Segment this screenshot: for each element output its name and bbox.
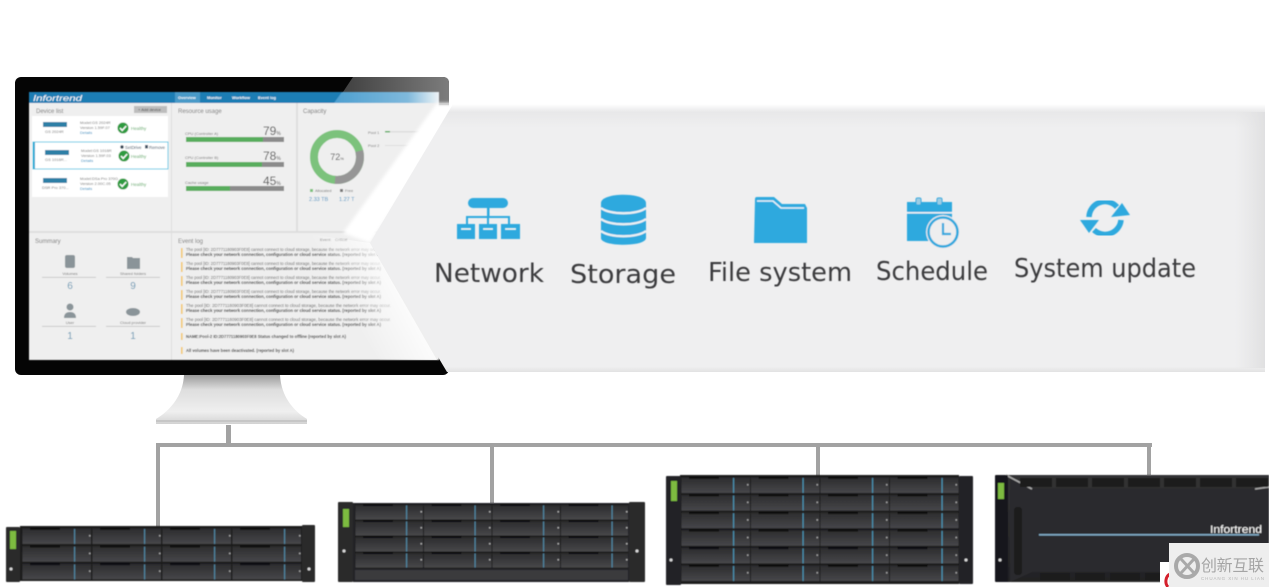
panel: capacity: Allocated xyxy=(315,188,331,193)
panel: capacity: Free xyxy=(345,188,354,193)
device card 2 selected: SetDrive xyxy=(125,145,142,150)
panel: event log: Please check your network connection, configuration or cloud service status. (reported by slot A) xyxy=(186,322,382,327)
panel: event log: The pool [ID: 2D7771180903F0E8] cannot connect to cloud storage, because the network error may occur. xyxy=(186,261,381,266)
device card 2 selected xyxy=(33,142,168,169)
stat: user: User xyxy=(66,320,75,325)
stat: cloud provider: Cloud provider xyxy=(120,320,147,325)
label: network: Network xyxy=(434,259,544,289)
device card 2 selected: Healthy xyxy=(131,154,147,159)
top navigation bar: Overview xyxy=(178,95,197,100)
top navigation bar: Infortrend xyxy=(33,93,82,103)
bar: cache: 45% xyxy=(263,174,281,188)
bar: CPU B: 78% xyxy=(263,149,281,163)
feature: schedule xyxy=(876,198,988,287)
bar: CPU B xyxy=(185,149,284,167)
watermark: CHUANG XIN HU LIAN xyxy=(1201,576,1264,581)
panel: event log xyxy=(172,233,439,360)
stat: volumes: Volumes xyxy=(62,271,78,276)
icon: calendar clock xyxy=(907,198,960,249)
panel: feature chevron xyxy=(370,103,1269,372)
bar: CPU A: 79% xyxy=(263,124,281,138)
monitor stand xyxy=(156,375,307,424)
panel: capacity: 2.33 TB xyxy=(309,197,328,203)
stat: cloud provider: 1 xyxy=(130,331,136,342)
panel: event log: The pool [ID: 2D7771180903F0E8] cannot connect to cloud storage, because the network error may occur. xyxy=(186,317,391,322)
bar: CPU A: CPU (Controller A) xyxy=(185,131,219,136)
device card 2 selected: Details xyxy=(81,158,93,163)
icon: sync arrows xyxy=(1080,202,1130,234)
stat: user xyxy=(42,304,96,342)
top navigation bar: Event log xyxy=(258,95,277,100)
panel: event log: Please check your network connection, configuration or cloud service status. (reported by slot A) xyxy=(186,266,382,271)
device card 2 selected: GS 1016R... xyxy=(45,157,67,162)
monitor xyxy=(15,77,462,375)
panel: capacity: Pool 1 xyxy=(368,130,380,135)
stat: volumes: 6 xyxy=(67,281,73,292)
top navigation bar xyxy=(29,92,439,103)
feature: file system xyxy=(708,197,852,288)
watermark xyxy=(1160,543,1269,587)
watermark: 创新互联 xyxy=(1201,557,1264,575)
device card 1: Details xyxy=(80,130,92,135)
panel: event log: NAME:Pool-2 ID:2D7771180903F0E8 Status changed to offline (reported by slot A) xyxy=(186,334,347,339)
brand logo: Infortrend xyxy=(1210,524,1262,536)
panel: event log: The pool [ID: 2D7771180903F0E8] cannot connect to cloud storage, because the network error may occur. xyxy=(186,289,381,294)
device card 1: Model:GS 2024R xyxy=(80,120,111,125)
panel: capacity: Capacity xyxy=(303,109,326,115)
stat: shared folders: Shared folders xyxy=(120,271,146,276)
donut chart: 72% xyxy=(330,152,344,162)
server 3 xyxy=(666,475,973,585)
watermark logo xyxy=(1176,555,1198,577)
stat: cloud provider xyxy=(106,308,160,342)
bezel inner panel xyxy=(1010,475,1269,582)
device card 3: Model:DSa Pro 370G xyxy=(80,176,118,181)
device card 3: Details xyxy=(80,186,92,191)
device card 1: Healthy xyxy=(131,126,147,131)
panel: capacity: Pool 2 xyxy=(368,143,380,148)
icon: network xyxy=(457,198,520,239)
server 4 xyxy=(995,475,1269,582)
top navigation bar: Monitor xyxy=(207,95,222,100)
label: file system: File system xyxy=(708,258,852,288)
feature: storage xyxy=(570,195,676,290)
panel: event log: The pool [ID: 2D7771180903F0E8] cannot connect to cloud storage, because the network error may occur. xyxy=(186,275,381,280)
bar: CPU B: CPU (Controller B) xyxy=(185,155,219,160)
panel: device list: Device list xyxy=(36,109,64,115)
panel: event log: Please check your network connection, configuration or cloud service status. (reported by slot A) xyxy=(186,252,382,257)
panel: event log: The pool [ID: 2D7771180903F0E8] cannot connect to cloud storage, because the network error may occur. xyxy=(186,303,391,308)
panel: device list xyxy=(29,103,171,231)
left ear with LEDs xyxy=(666,476,681,585)
bar: CPU A xyxy=(185,124,284,142)
stat: user: 1 xyxy=(67,331,73,342)
panel: event log: The pool [ID: 2D7771180903F0E8] cannot connect to cloud storage, because the network error may occur. xyxy=(186,247,381,252)
panel: summary xyxy=(29,233,171,360)
feature: network xyxy=(434,198,544,289)
feature: system update xyxy=(1014,202,1196,284)
left ear with LEDs xyxy=(338,502,353,582)
panel: event log: Please check your network connection, configuration or cloud service status. (reported by slot A) xyxy=(186,308,382,313)
left ear with LEDs xyxy=(995,475,1008,582)
device card 2 selected: Remove xyxy=(149,145,166,150)
label: storage: Storage xyxy=(570,260,676,290)
panel: event log: All volumes have been deactivated. (reported by slot A) xyxy=(186,348,295,353)
panel: device list: + Add device xyxy=(138,107,162,112)
panel: event log: Event log xyxy=(178,239,203,245)
label: system update: System update xyxy=(1014,254,1196,284)
dashboard screen xyxy=(29,92,439,360)
top navigation bar: Workflow xyxy=(232,95,251,100)
icon: folder xyxy=(754,197,807,243)
bar: cache: Cache usage xyxy=(185,180,209,185)
panel: capacity: 1.27 T xyxy=(339,197,355,203)
bar: cache xyxy=(185,174,284,191)
panel: event log: Event: xyxy=(320,237,331,242)
stat: shared folders xyxy=(106,257,160,292)
panel: event log: Please check your network connection, configuration or cloud service status. (reported by slot A) xyxy=(186,280,382,285)
frame glare xyxy=(335,77,449,104)
device card 1 xyxy=(43,120,147,135)
panel: resource usage xyxy=(172,103,296,231)
device card 3: DSR Pro 370... xyxy=(42,185,69,190)
device card 2 selected: Model:GS 1016R xyxy=(81,148,112,153)
device card 2 selected: Version 1.59F.03 xyxy=(81,153,112,158)
label: schedule: Schedule xyxy=(876,257,988,287)
accent line xyxy=(1039,534,1259,536)
panel: summary: Summary xyxy=(35,239,61,245)
panel: capacity xyxy=(298,103,439,231)
white fade over screen xyxy=(300,233,437,360)
connector lines xyxy=(156,425,1152,527)
device card 3 xyxy=(42,176,147,191)
device card 3: Version 2.00C.05 xyxy=(80,181,111,186)
white diagonal band xyxy=(343,103,462,243)
left ear with LEDs xyxy=(6,527,20,582)
panel: event log: Please check your network connection, configuration or cloud service status. (reported by slot A) xyxy=(186,294,382,299)
donut chart xyxy=(314,134,360,180)
panel: event log: Critical xyxy=(335,237,347,242)
server 2 xyxy=(338,502,645,582)
server 1 xyxy=(6,525,315,582)
icon: storage xyxy=(601,195,646,245)
device card 3: Healthy xyxy=(131,182,147,187)
panel: resource usage: Resource usage xyxy=(178,109,222,115)
device card 1: Version 1.59F.07 xyxy=(80,125,111,130)
monitor frame xyxy=(15,77,449,375)
device card 1: GS 2024R xyxy=(45,129,64,134)
stat: shared folders: 9 xyxy=(130,281,136,292)
stat: volumes xyxy=(42,255,96,292)
